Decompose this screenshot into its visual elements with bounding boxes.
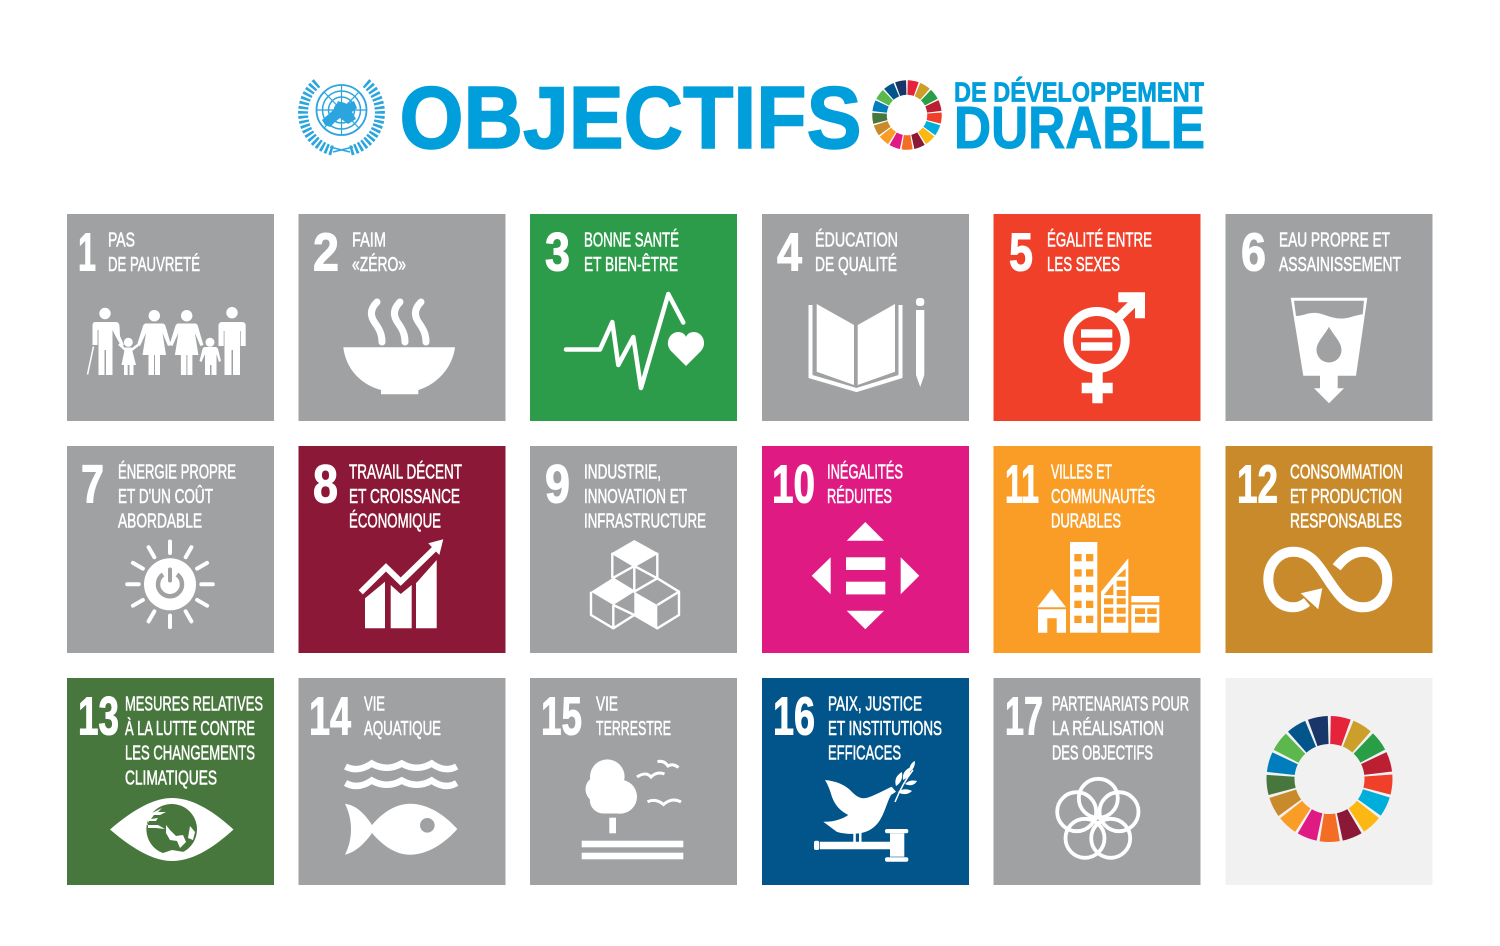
- label goal 16: [828, 692, 942, 764]
- subtitle: de développement durable: DURABLE: [954, 95, 1205, 161]
- label goal 6: ASSAINISSEMENT: [1279, 253, 1401, 276]
- label goal 11: DURABLES: [1051, 509, 1121, 532]
- label goal 1: PAS: [108, 228, 135, 251]
- icon: tree and birds: [582, 759, 683, 859]
- icon: SDG colour wheel: [1260, 710, 1399, 848]
- panel: goal 10: [762, 446, 969, 653]
- label goal 1: DE PAUVRETÉ: [108, 253, 200, 276]
- icon: family: [88, 307, 246, 375]
- panel: SDG wheel tile: [1226, 678, 1432, 885]
- subtitle: de développement durable: DE DÉVELOPPEMENT: [954, 76, 1204, 108]
- label goal 8: TRAVAIL DÉCENT: [349, 460, 462, 483]
- panel: goal 16: [762, 678, 969, 885]
- label goal 13: À LA LUTTE CONTRE: [125, 717, 255, 740]
- label goal 17: LA RÉALISATION: [1052, 717, 1164, 740]
- label goal 11: COMMUNAUTÉS: [1051, 485, 1155, 508]
- label goal 11: VILLES ET: [1051, 460, 1112, 483]
- panel: goal 6: [1226, 214, 1432, 421]
- icon: gender equality: [1068, 292, 1145, 403]
- icon: growth chart: [361, 539, 443, 628]
- icon: sun power: [127, 542, 213, 627]
- icon: five rings: [1057, 779, 1138, 858]
- label goal 4: ÉDUCATION: [815, 228, 898, 251]
- icon: infinity loop: [1268, 552, 1387, 609]
- number 2: 2: [313, 222, 339, 282]
- number 4: 4: [777, 222, 802, 282]
- label goal 12: [1290, 460, 1403, 532]
- label goal 14: VIE: [364, 692, 385, 715]
- label goal 15: [596, 692, 671, 740]
- label goal 13: LES CHANGEMENTS: [125, 741, 255, 764]
- number 8: 8: [313, 454, 338, 514]
- label goal 16: PAIX, JUSTICE: [828, 692, 922, 715]
- label goal 7: ABORDABLE: [118, 509, 202, 532]
- icon: book and pencil: [810, 298, 924, 390]
- label goal 17: [1052, 692, 1189, 764]
- label goal 5: [1047, 228, 1152, 276]
- panel: goal 1: [67, 214, 274, 421]
- label goal 9: INNOVATION ET: [584, 485, 687, 508]
- label goal 7: [118, 460, 236, 532]
- icon: eye with globe: [110, 798, 234, 861]
- header: title banner: [303, 68, 1205, 167]
- subtitle: de développement durable: [954, 76, 1205, 161]
- label goal 14: AQUATIQUE: [364, 717, 441, 740]
- panel: goal 11: [994, 446, 1200, 653]
- label goal 15: VIE: [596, 692, 618, 715]
- label goal 9: INDUSTRIE,: [584, 460, 661, 483]
- label goal 10: INÉGALITÉS: [827, 460, 903, 483]
- panel: goal 3: [530, 214, 737, 421]
- icon: bowl: [343, 302, 455, 394]
- icon: city: [1037, 542, 1159, 633]
- label goal 4: DE QUALITÉ: [815, 253, 897, 276]
- icon: header colour wheel: [868, 76, 946, 154]
- label goal 1: [108, 228, 200, 276]
- label goal 13: MESURES RELATIVES: [125, 692, 263, 715]
- label goal 12: CONSOMMATION: [1290, 460, 1403, 483]
- title: OBJECTIFS: OBJECTIFS: [400, 68, 862, 167]
- number 6: 6: [1241, 222, 1266, 282]
- panel: goal 4: [762, 214, 969, 421]
- icon: fish and waves: [345, 764, 457, 855]
- number 13: 13: [78, 686, 119, 746]
- panel: goal 13: [67, 678, 274, 885]
- icon: cubes: [591, 540, 679, 628]
- label goal 8: [349, 460, 462, 532]
- label goal 9: INFRASTRUCTURE: [584, 509, 706, 532]
- label goal 15: TERRESTRE: [596, 717, 671, 740]
- icon: equality arrows: [812, 522, 919, 629]
- number 7: 7: [81, 454, 104, 514]
- label goal 7: ÉNERGIE PROPRE: [118, 460, 236, 483]
- panel: goal 12: [1226, 446, 1432, 653]
- label goal 10: RÉDUITES: [827, 485, 892, 508]
- label goal 16: ET INSTITUTIONS: [828, 717, 942, 740]
- label goal 7: ET D'UN COÛT: [118, 485, 213, 508]
- label goal 9: [584, 460, 706, 532]
- label goal 5: LES SEXES: [1047, 253, 1120, 276]
- label goal 2: [352, 228, 406, 276]
- number 16: 16: [773, 686, 815, 746]
- label goal 13: CLIMATIQUES: [125, 766, 217, 789]
- panel: goal 9: [530, 446, 737, 653]
- number 3: 3: [545, 222, 570, 282]
- number 14: 14: [309, 686, 351, 746]
- label goal 13: [125, 692, 263, 789]
- label goal 8: ÉCONOMIQUE: [349, 509, 441, 532]
- label goal 3: ET BIEN-ÊTRE: [584, 253, 678, 276]
- label goal 14: [364, 692, 441, 740]
- number 5: 5: [1009, 222, 1033, 282]
- label goal 6: EAU PROPRE ET: [1279, 228, 1390, 251]
- panel: goal 14: [298, 678, 506, 885]
- icon: UN emblem: [303, 83, 380, 152]
- label goal 12: ET PRODUCTION: [1290, 485, 1402, 508]
- label goal 3: BONNE SANTÉ: [584, 228, 679, 251]
- number 10: 10: [772, 454, 815, 514]
- label goal 6: [1279, 228, 1401, 276]
- label goal 17: DES OBJECTIFS: [1052, 741, 1153, 764]
- label goal 2: FAIM: [352, 228, 386, 251]
- icon: water glass: [1291, 298, 1367, 403]
- panel: goal 15: [530, 678, 737, 885]
- label goal 16: EFFICACES: [828, 741, 901, 764]
- number 9: 9: [545, 454, 570, 514]
- panel: goal 7: [67, 446, 274, 653]
- panel: goal 2: [298, 214, 506, 421]
- label goal 10: [827, 460, 903, 508]
- number 17: 17: [1005, 686, 1043, 746]
- label goal 17: PARTENARIATS POUR: [1052, 692, 1189, 715]
- icon: heartbeat: [566, 294, 704, 388]
- panel: goal 5: [994, 214, 1200, 421]
- label goal 3: [584, 228, 679, 276]
- panel: goal 8: [298, 446, 506, 653]
- number 1: 1: [78, 222, 96, 282]
- number 11: 11: [1005, 454, 1039, 514]
- label goal 5: ÉGALITÉ ENTRE: [1047, 228, 1152, 251]
- label goal 4: [815, 228, 898, 276]
- number 12: 12: [1237, 454, 1278, 514]
- icon: dove and gavel: [814, 761, 917, 862]
- number 15: 15: [541, 686, 582, 746]
- label goal 12: RESPONSABLES: [1290, 509, 1402, 532]
- label goal 8: ET CROISSANCE: [349, 485, 460, 508]
- label goal 11: [1051, 460, 1155, 532]
- label goal 2: «ZÉRO»: [352, 253, 406, 276]
- panel: goal 17: [994, 678, 1200, 885]
